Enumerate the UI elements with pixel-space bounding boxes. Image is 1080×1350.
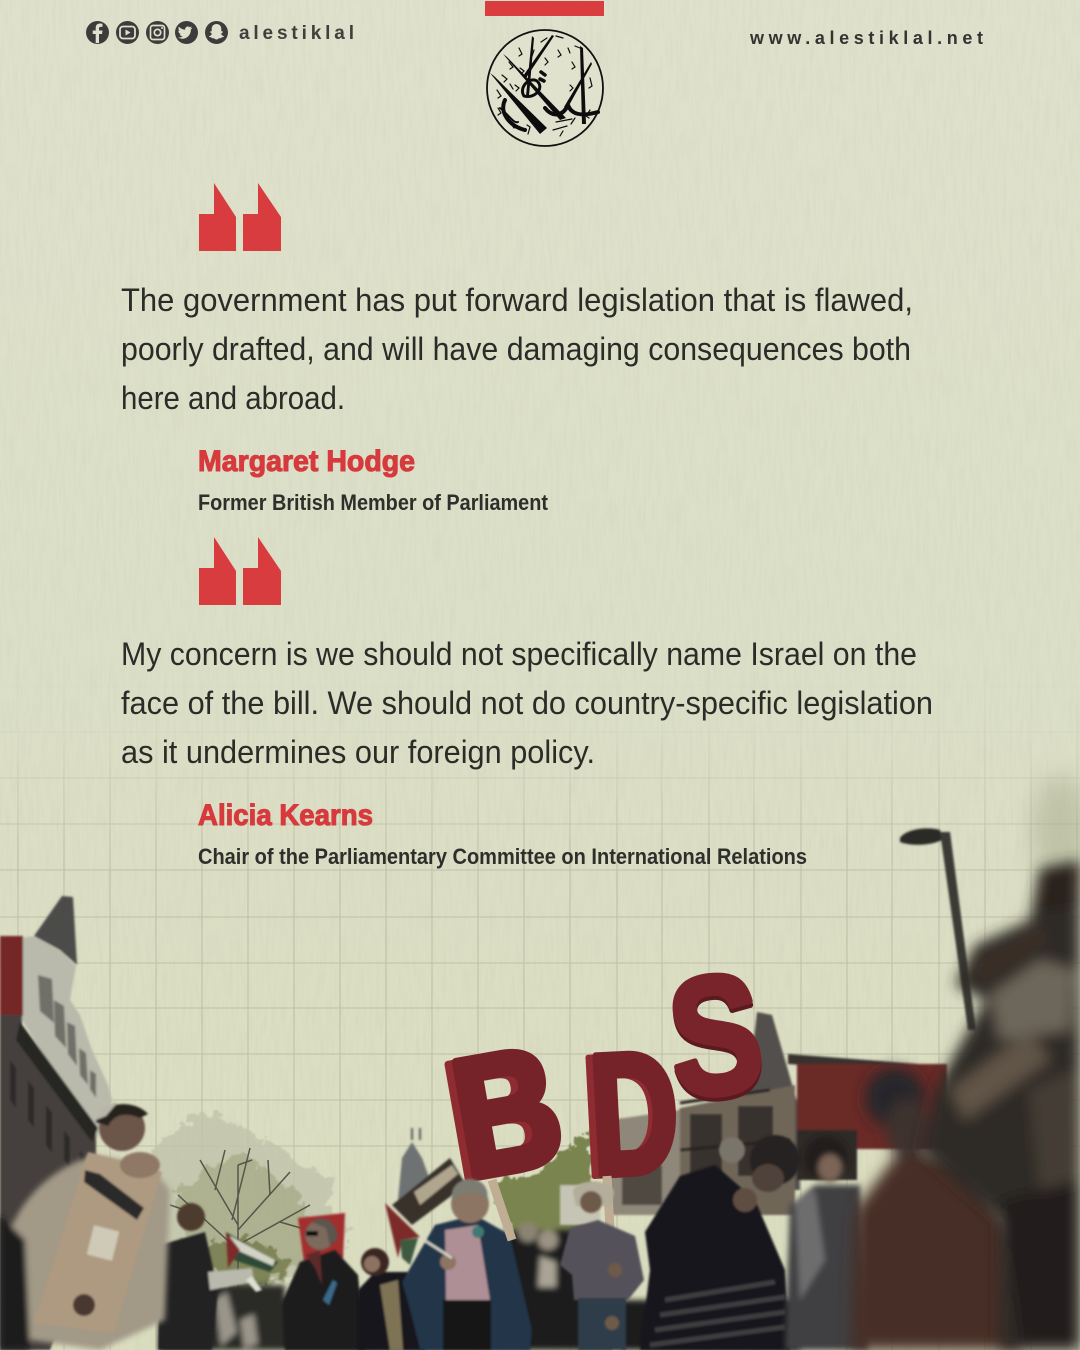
torso	[920, 860, 1080, 1350]
quote 2 text: face of the bill. We should not do country-specific legislation	[121, 685, 933, 721]
logo: calligraphic roundel	[487, 30, 603, 146]
protest photo	[0, 775, 1080, 1350]
woman with scarf	[358, 1248, 425, 1350]
BDS sign letters	[432, 937, 771, 1216]
woman in sunglasses	[283, 1219, 365, 1350]
sweater and arms	[0, 1155, 170, 1350]
icon: twitter	[175, 21, 198, 44]
red top bar	[485, 1, 604, 16]
head and cap	[96, 1102, 148, 1151]
left building	[0, 896, 112, 1350]
social icons row	[86, 21, 228, 44]
crowd background	[160, 1222, 800, 1350]
speaker name: Margaret Hodge: Margaret Hodge	[198, 445, 415, 478]
branches	[170, 1148, 325, 1290]
man in black jacket	[640, 1135, 800, 1350]
quote mark 1	[199, 183, 281, 251]
quote mark 2	[199, 537, 281, 605]
distant tree	[152, 1112, 345, 1300]
cardboard box	[34, 1152, 162, 1333]
speaker name: Alicia Kearns: Alicia Kearns	[198, 799, 373, 832]
quote 1 text: poorly drafted, and will have damaging consequences both	[121, 331, 911, 367]
handle: alestiklal: alestiklal	[239, 23, 354, 44]
letter B: B	[440, 1010, 575, 1213]
website url: www.alestiklal.net	[749, 28, 983, 48]
quote 1 text: The government has put forward legislation that is flawed,	[121, 282, 913, 318]
tower and rooftops behind centre	[392, 1128, 466, 1225]
quote 2 text	[121, 636, 933, 770]
person with white sleeve	[158, 1203, 262, 1350]
hand on box	[120, 1152, 160, 1178]
speaker role: committee chair: Chair of the Parliamentary Committee on International Relations	[198, 844, 807, 869]
foliage haze	[1032, 775, 1080, 885]
letter D: D	[577, 1017, 679, 1213]
letter S: S	[660, 937, 771, 1133]
icon: facebook	[86, 21, 109, 44]
paper background	[0, 686, 1080, 1350]
letter D: D	[585, 1016, 683, 1212]
quote 2 text: My concern is we should not specifically name Israel on the	[121, 636, 917, 672]
sign poles	[492, 1176, 617, 1350]
speaker role: Former British MP: Former British Member of Parliament	[198, 490, 549, 515]
quote 1 text	[121, 282, 913, 416]
icon: snapchat	[205, 21, 228, 44]
foliage	[152, 1112, 345, 1300]
letter S: S	[660, 941, 771, 1137]
icon: youtube	[116, 21, 139, 44]
man with pith hat	[560, 1182, 644, 1350]
right houses	[560, 1012, 947, 1225]
man with box	[0, 1102, 170, 1350]
centre man in blue jacket	[402, 1179, 532, 1350]
blurred man at right	[920, 775, 1080, 1350]
palestinian flags	[226, 1203, 420, 1272]
street lamp	[900, 828, 976, 1030]
icon: instagram	[146, 21, 169, 44]
green trees beside letters	[490, 1130, 595, 1245]
letter B: B	[432, 1013, 567, 1216]
quote 1 text: here and abroad.	[121, 380, 345, 416]
blurred woman in brown	[850, 1068, 1020, 1350]
quote 2 text: as it undermines our foreign policy.	[121, 734, 595, 770]
woman in grey	[785, 1136, 868, 1350]
